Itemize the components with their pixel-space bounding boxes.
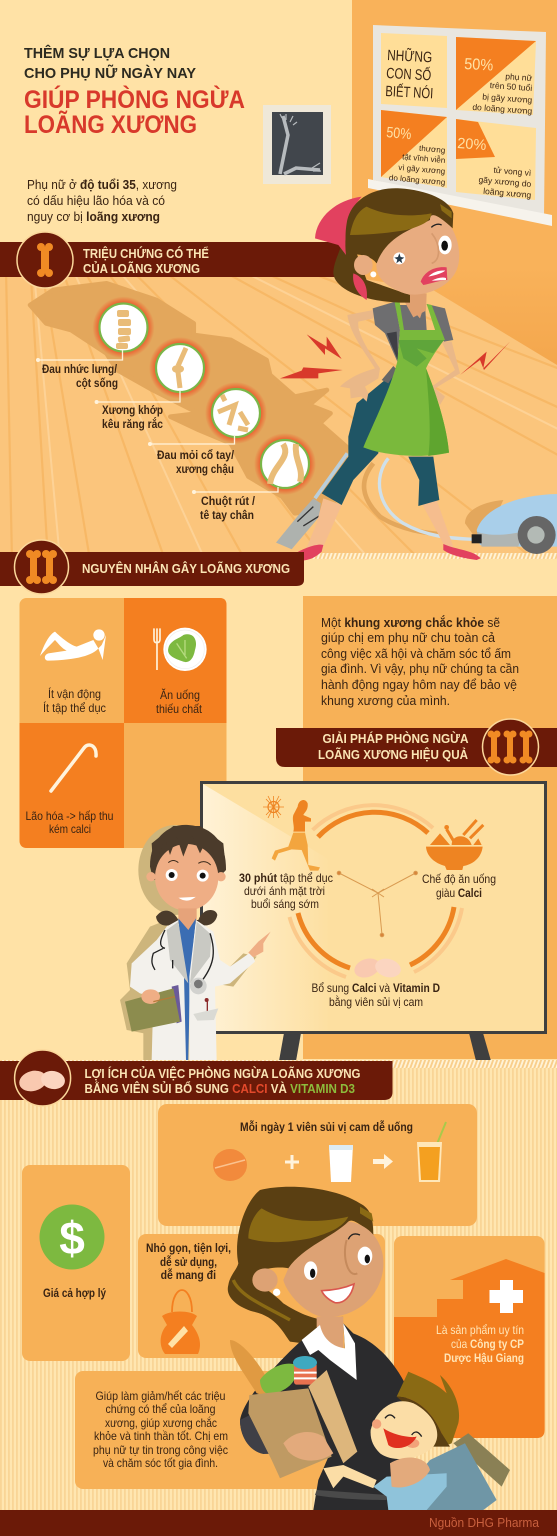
window with statistics xyxy=(368,25,552,226)
panel: company: Là sản phẩm uy tín xyxy=(436,1323,524,1337)
title: LOÃNG XƯƠNG xyxy=(24,109,197,139)
panel: benefit text: Giúp làm giảm/hết các triệu xyxy=(96,1389,226,1403)
icon: plate and fork xyxy=(154,628,207,671)
cycle arcs xyxy=(290,805,462,977)
footer bar xyxy=(0,1510,557,1536)
woman with vacuum xyxy=(276,300,557,561)
window with statistics: 50% xyxy=(464,56,494,75)
panel: price: $ xyxy=(59,1212,85,1264)
panel: daily dose: Mỗi ngày 1 viên sủi vị cam dễ uống xyxy=(240,1119,413,1134)
panel: benefit text xyxy=(75,1371,337,1489)
mother with child xyxy=(228,1187,510,1510)
icon: runner xyxy=(272,800,320,871)
icon: cane xyxy=(51,745,96,791)
presentation board: dưới ánh mặt trời xyxy=(244,884,325,898)
panel: causes grid xyxy=(20,598,226,848)
icon: bag xyxy=(161,1290,200,1354)
text: strong skeleton: khung xương của mình. xyxy=(321,693,450,708)
banner III: solutions: GIẢI PHÁP PHÒNG NGỪA xyxy=(322,731,469,746)
banner I: symptoms xyxy=(0,232,350,288)
text: strong skeleton: giúp chị em phụ nữ chu toàn cả xyxy=(321,630,496,645)
banner II: causes xyxy=(0,540,304,594)
symptom: cramps xyxy=(192,433,316,522)
symptom: cramps: Chuột rút / xyxy=(201,496,256,508)
banner IV background xyxy=(0,1060,557,1068)
text: strong skeleton: gia đình. Vì vậy, phụ nữ chúng ta cần xyxy=(321,661,519,676)
window with statistics: do loãng xương xyxy=(389,173,446,187)
panel: right column xyxy=(303,596,557,1059)
icon: cross xyxy=(490,1280,523,1313)
banner IV: benefits xyxy=(0,1050,392,1106)
symptom: joints: Xương khớp xyxy=(102,405,163,417)
symptom: wrist: Đau mỏi cổ tay/ xyxy=(157,450,235,462)
panel: causes grid: Ít vận động xyxy=(48,686,101,701)
intro text: có dấu hiệu lão hóa và có xyxy=(27,193,165,208)
panel: benefit text: khỏe và tinh thần tốt. Chị em xyxy=(94,1429,228,1443)
panel: price: Giá cả hợp lý xyxy=(43,1286,106,1300)
window with statistics: thương xyxy=(419,144,446,155)
icon: plus xyxy=(285,1155,299,1169)
symptom: joints xyxy=(95,337,211,431)
window with statistics: 50% xyxy=(386,124,412,143)
panel: convenient xyxy=(138,1234,385,1358)
icon: bowl xyxy=(426,820,483,870)
banner IV: benefits: LỢI ÍCH CỦA VIỆC PHÒNG NGỪA LOÃNG XƯƠNG xyxy=(84,1066,360,1081)
panel: convenient: dễ mang đi xyxy=(161,1267,216,1282)
title: GIÚP PHÒNG NGỪA xyxy=(24,84,245,114)
panel: convenient: dễ sử dụng, xyxy=(160,1254,217,1269)
footer bar: Nguồn DHG Pharma xyxy=(429,1515,540,1530)
banner III: solutions xyxy=(276,719,557,775)
icon: glass xyxy=(329,1145,353,1182)
icon: sun xyxy=(263,796,284,818)
floor xyxy=(0,277,557,553)
presentation board: buổi sáng sớm xyxy=(251,897,319,911)
text: strong skeleton: công việc xã hội và chăm sóc tổ ấm xyxy=(321,646,511,661)
window with statistics: trên 50 tuổi xyxy=(489,80,533,93)
title xyxy=(24,44,245,139)
banner II: causes: NGUYÊN NHÂN GÂY LOÃNG XƯƠNG xyxy=(82,561,290,576)
window with statistics: tử vong vì xyxy=(493,165,532,178)
woman head xyxy=(315,188,459,317)
banner I: symptoms: CỦA LOÃNG XƯƠNG xyxy=(83,261,200,276)
panel: benefit text: và chăm sóc tốt gia đình. xyxy=(103,1456,218,1470)
window with statistics: CON SỐ xyxy=(386,64,432,84)
top background xyxy=(0,0,557,280)
presentation board: Chế độ ăn uống xyxy=(422,872,496,886)
icon: pharmacy building xyxy=(394,1259,545,1438)
panel: company xyxy=(394,1236,545,1438)
window with statistics: gãy xương do xyxy=(478,174,532,189)
panel: price xyxy=(22,1165,130,1361)
window with statistics: do loãng xương xyxy=(472,102,533,116)
intro text: Phụ nữ ở độ tuổi 35, xương xyxy=(27,177,177,192)
panel: company: của Công ty CP xyxy=(451,1337,524,1351)
lower band background xyxy=(0,553,557,559)
window with statistics: bị gãy xương xyxy=(482,92,533,105)
wall xyxy=(352,0,557,380)
title: CHO PHỤ NỮ NGÀY NAY xyxy=(24,64,196,82)
center connector xyxy=(337,871,417,937)
icon: arrow xyxy=(373,1154,393,1169)
text: strong skeleton: hành động ngay hôm nay để bảo vệ xyxy=(321,677,517,692)
window with statistics: vì gãy xương xyxy=(398,163,446,176)
x-ray picture xyxy=(263,105,331,184)
presentation board: Bổ sung Calci và Vitamin D xyxy=(312,981,440,995)
window with statistics: phụ nữ xyxy=(505,71,533,83)
presentation board xyxy=(202,782,546,1061)
window with statistics: 20% xyxy=(457,135,487,154)
panel: benefit text: chứng có thể của loãng xyxy=(106,1402,216,1416)
symptom: back pain: Đau nhức lưng/ xyxy=(42,364,118,376)
symptom: back pain: cột sống xyxy=(76,378,118,390)
presentation board: bằng viên sủi vị cam xyxy=(329,994,423,1009)
window with statistics: tật vĩnh viễn xyxy=(402,152,446,165)
icon: person lying xyxy=(40,629,106,661)
title: THÊM SỰ LỰA CHỌN xyxy=(24,44,170,62)
presentation board: 30 phút tập thể dục xyxy=(239,871,333,885)
panel: causes grid: Lão hóa -> hấp thu xyxy=(26,809,114,823)
panel: daily dose xyxy=(158,1104,477,1226)
panel: convenient: Nhỏ gọn, tiện lợi, xyxy=(146,1241,231,1255)
banner III: solutions: LOÃNG XƯƠNG HIỆU QUẢ xyxy=(318,747,469,762)
woman shadow on floor xyxy=(30,283,346,513)
window with statistics: BIẾT NÓI xyxy=(385,83,434,102)
icon: tablets xyxy=(352,955,403,981)
panel: benefit text: phụ nữ tự tin trong công việc xyxy=(93,1443,228,1457)
window with statistics: NHỮNG xyxy=(387,47,433,66)
panel: causes grid: Ăn uống xyxy=(160,687,200,702)
symptom: back pain xyxy=(36,296,154,390)
panel: benefit text: xương, giúp xương chắc xyxy=(105,1415,217,1430)
presentation board: giàu Calci xyxy=(436,886,482,900)
intro text xyxy=(27,177,177,224)
panel: causes grid: Ít tập thể dục xyxy=(43,700,106,715)
symptom: wrist xyxy=(148,382,267,476)
banner IV: benefits: BẰNG VIÊN SỦI BỔ SUNG CALCI VÀ VITAMIN D3 xyxy=(84,1081,355,1096)
window with statistics: loãng xương xyxy=(483,186,532,200)
icon: juice xyxy=(417,1122,446,1182)
panel: causes grid: thiếu chất xyxy=(156,702,203,716)
symptom: wrist: xương chậu xyxy=(176,464,234,476)
text: strong skeleton xyxy=(321,615,519,708)
panel: causes grid: kém calci xyxy=(49,822,91,836)
icon: tablet xyxy=(213,1149,247,1181)
symptom: joints: kêu răng rắc xyxy=(102,418,164,431)
text: strong skeleton: Một khung xương chắc khỏe sẽ xyxy=(321,615,500,630)
panel: company: Dược Hậu Giang xyxy=(444,1351,524,1365)
banner I: symptoms: TRIỆU CHỨNG CÓ THỂ xyxy=(83,246,209,261)
intro text: nguy cơ bị loãng xương xyxy=(27,209,160,224)
doctor xyxy=(120,825,271,1060)
symptom: cramps: tê tay chân xyxy=(200,510,254,522)
